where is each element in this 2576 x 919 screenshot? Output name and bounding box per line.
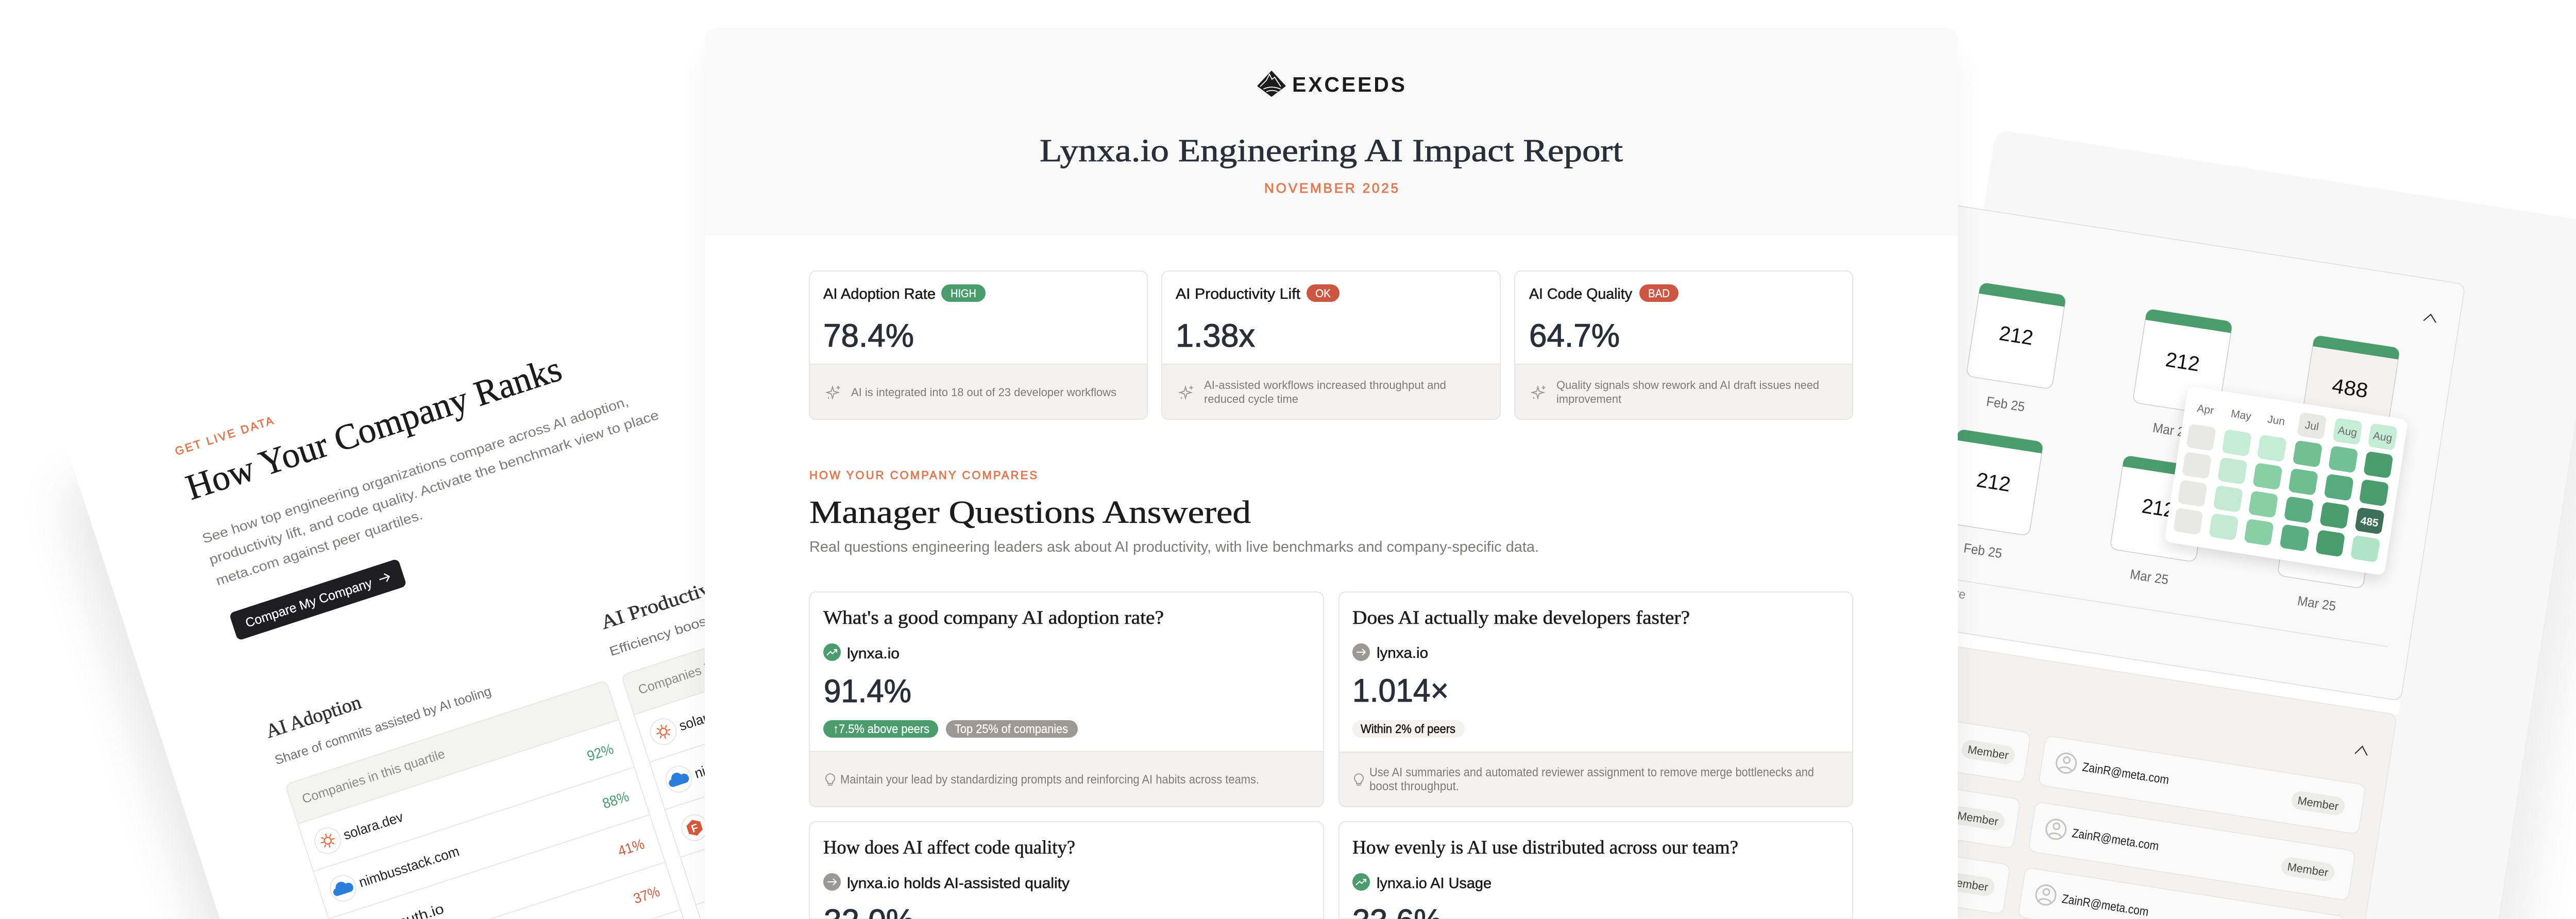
- row: nimbusstack.com: 88%: [601, 788, 631, 812]
- heatmap cells: 485: [2360, 515, 2380, 530]
- member rows left column: Member: [1946, 875, 1989, 894]
- tile: feb 25 row two: [1939, 429, 2043, 565]
- row: azimuth.io: [343, 831, 648, 919]
- tile: mar 25: 212: [2164, 348, 2201, 376]
- heatmap header months: May: [2230, 408, 2252, 422]
- question card: developer speed: lynxa.io: [1377, 645, 1428, 661]
- button: compare my company: [229, 558, 407, 641]
- intro paragraph: meta.com against peer quartiles.: [214, 507, 425, 588]
- member row: ZainR@meta.com: [2081, 760, 2170, 787]
- heatmap header months: Aug: [2372, 430, 2393, 445]
- row: solara.dev: [312, 736, 617, 857]
- heatmap header months: Jun: [2267, 414, 2286, 428]
- tile: feb 25 row two: 212: [1975, 469, 2012, 496]
- row: fourth company: 37%: [631, 883, 662, 907]
- heatmap header months: Aug: [2337, 424, 2358, 439]
- kpi card: ai productivity lift: AI Productivity Lift: [1176, 286, 1300, 302]
- member row: ZainR@meta.com: [2071, 826, 2160, 854]
- tile: feb 25: Feb 25: [1986, 394, 2026, 415]
- button: compare my company: Compare My Company: [244, 576, 374, 631]
- member rows left column: [1683, 684, 2031, 914]
- eyebrow: get live data: GET LIVE DATA: [173, 414, 275, 458]
- tile: feb 25: 212: [1997, 322, 2035, 350]
- question card: usage distribution: [1339, 822, 1853, 919]
- question card: developer speed: 1.014×: [1352, 673, 1449, 709]
- table: ai productivity quartile: [621, 571, 1036, 919]
- panel: team activity background sheet: [1650, 98, 2576, 919]
- icon: red hexagon: [679, 811, 711, 844]
- member row: [2028, 802, 2355, 900]
- tile: selected 488: 488: [2330, 375, 2369, 402]
- intro paragraph: See how top engineering organizations compare across AI adoption,: [200, 394, 630, 547]
- row: solara.dev: 92%: [585, 741, 616, 764]
- row: solara.dev: solara.dev: [342, 809, 405, 843]
- question card: adoption rate: [809, 592, 1324, 807]
- tile: mar 25 row two: 212: [2140, 495, 2176, 522]
- gap between cards: [1713, 594, 2401, 715]
- row: azimuth.io: 41%: [616, 836, 647, 859]
- kpi card: ai adoption rate: AI is integrated into 18 out of 23 developer workflows: [851, 386, 1116, 399]
- report header: [705, 28, 1958, 235]
- tile: mar 25: [2128, 309, 2232, 445]
- question card: developer speed: Within 2% of peers: [1361, 722, 1455, 736]
- tile: mar 25 behind popup: [2273, 482, 2377, 618]
- kpi card: ai productivity lift: reduced cycle time: [1204, 393, 1298, 405]
- label: solara.dev: solara.dev: [677, 700, 741, 734]
- section eyebrow: HOW YOUR COMPANY COMPARES: [809, 469, 1037, 482]
- kpi card: ai code quality: [1515, 271, 1853, 419]
- logo: exceeds: [1257, 71, 1405, 97]
- heatmap header months: Jul: [2304, 419, 2319, 433]
- question card: adoption rate: Top 25% of companies: [955, 722, 1068, 736]
- member rows left column: Member: [1967, 743, 2009, 762]
- intro paragraph: [200, 386, 668, 588]
- question card: usage distribution: How evenly is AI use distributed across our team?: [1352, 837, 1738, 858]
- card: team members: [1650, 609, 2397, 919]
- question card: code quality: [809, 822, 1324, 919]
- tile: mar 25: Mar 25: [2152, 420, 2192, 441]
- row: nimbusstack.com: nimbusstack.com: [357, 843, 461, 890]
- member row: Member: [2297, 794, 2340, 813]
- question card: code quality: lynxa.io holds AI-assisted quality: [847, 875, 1070, 892]
- icon: nimbus cloud: [663, 763, 695, 795]
- question card: usage distribution: lynxa.io AI Usage: [1377, 875, 1492, 892]
- kpi card: ai adoption rate: [809, 271, 1147, 419]
- popup: usage heatmap: [2163, 386, 2408, 581]
- divider footer label: [1720, 544, 2388, 667]
- question card: developer speed: [1339, 592, 1853, 807]
- question card: adoption rate: Maintain your lead by standardizing prompts and reinforcing AI habits across teams.: [840, 773, 1259, 787]
- icon: collapse chevron: [2424, 314, 2437, 322]
- kpi card: ai code quality: Quality signals show rework and AI draft issues need: [1556, 379, 1819, 392]
- table: ai adoption quartile: [285, 680, 700, 919]
- member row: [2039, 736, 2366, 835]
- question card: developer speed: Does AI actually make developers faster?: [1352, 607, 1690, 628]
- heading: ai adoption: AI Adoption: [263, 691, 364, 742]
- kpi card: ai adoption rate: AI Adoption Rate: [823, 286, 936, 302]
- logo: exceeds: EXCEEDS: [1292, 73, 1405, 96]
- section subtitle: Real questions engineering leaders ask about AI productivity, with live benchmarks and company-specific data.: [809, 539, 1539, 555]
- tile: selected 488: [2296, 335, 2400, 471]
- heatmap header months: Apr: [2196, 402, 2215, 417]
- question card: adoption rate: What's a good company AI adoption rate?: [823, 607, 1164, 628]
- section heading: Manager Questions Answered: [809, 495, 1251, 530]
- heading: ai productivity: AI Productivity Lift: [598, 559, 772, 634]
- kpi card: ai productivity lift: 1.38x: [1176, 318, 1255, 354]
- member row: [2018, 867, 2345, 919]
- card: monthly activity calendar: [1716, 178, 2465, 701]
- question card: code quality: How does AI affect code quality?: [823, 837, 1075, 858]
- table: ai productivity quartile: Companies in this quartile: [636, 637, 783, 697]
- kpi card: ai adoption rate: 78.4%: [823, 318, 914, 354]
- kpi card: ai productivity lift: [1162, 271, 1500, 419]
- divider footer label: Score: [1933, 583, 1967, 602]
- tile: selected 488: Mar 25: [2319, 446, 2360, 467]
- tile: mar 25 row two: Mar 25: [2129, 566, 2170, 587]
- icon: red hexagon: F: [690, 822, 700, 835]
- member rows left column: Member: [1957, 809, 1999, 828]
- intro paragraph: productivity lift, and code quality. Activate the benchmark view to place: [207, 407, 660, 568]
- subtitle: ai adoption: Share of commits assisted by AI tooling: [273, 684, 493, 768]
- subtitle: ai productivity: Efficiency boost from AI tooling: [607, 582, 808, 659]
- label: nimbusstack.com: nimbusstack.com: [692, 734, 797, 781]
- panel: main report: [705, 28, 1958, 919]
- icon: collapse chevron: [2355, 745, 2368, 756]
- tile: mar 25 behind popup: Mar 25: [2296, 593, 2337, 614]
- question card: adoption rate: lynxa.io: [847, 645, 900, 662]
- kpi card: ai code quality: 64.7%: [1529, 318, 1620, 354]
- table: ai adoption quartile: Companies in this quartile: [300, 746, 447, 807]
- tile: mar 25 row two: [2106, 455, 2210, 591]
- tile: feb 25: [1962, 282, 2066, 418]
- question card: developer speed: boost throughput.: [1369, 779, 1459, 793]
- member row: Member: [2286, 860, 2329, 879]
- heading: how your company ranks: How Your Company Ranks: [181, 349, 566, 508]
- kpi card: ai adoption rate: HIGH: [951, 287, 976, 300]
- question card: adoption rate: 91.4%: [824, 673, 911, 709]
- question card: adoption rate: ↑7.5% above peers: [833, 722, 929, 736]
- heatmap cells: [2173, 423, 2394, 563]
- kpi card: ai productivity lift: AI-assisted workflows increased throughput and: [1204, 379, 1446, 392]
- question card: developer speed: Use AI summaries and automated reviewer assignment to remove merge bottlenecks and: [1369, 765, 1814, 779]
- panel: how your company ranks: [38, 174, 1036, 919]
- report title: Lynxa.io Engineering AI Impact Report: [1040, 133, 1623, 168]
- row: nimbusstack.com: [327, 784, 632, 905]
- icon: solara sun: [647, 716, 680, 748]
- kpi card: ai code quality: BAD: [1648, 287, 1670, 300]
- kpi card: ai code quality: AI Code Quality: [1529, 286, 1632, 302]
- kpi card: ai code quality: improvement: [1556, 393, 1621, 405]
- kpi card: ai productivity lift: OK: [1315, 287, 1331, 300]
- report date: NOVEMBER 2025: [1264, 180, 1398, 196]
- heatmap header months: [2195, 396, 2398, 451]
- tile: feb 25 row two: Feb 25: [1962, 540, 2003, 561]
